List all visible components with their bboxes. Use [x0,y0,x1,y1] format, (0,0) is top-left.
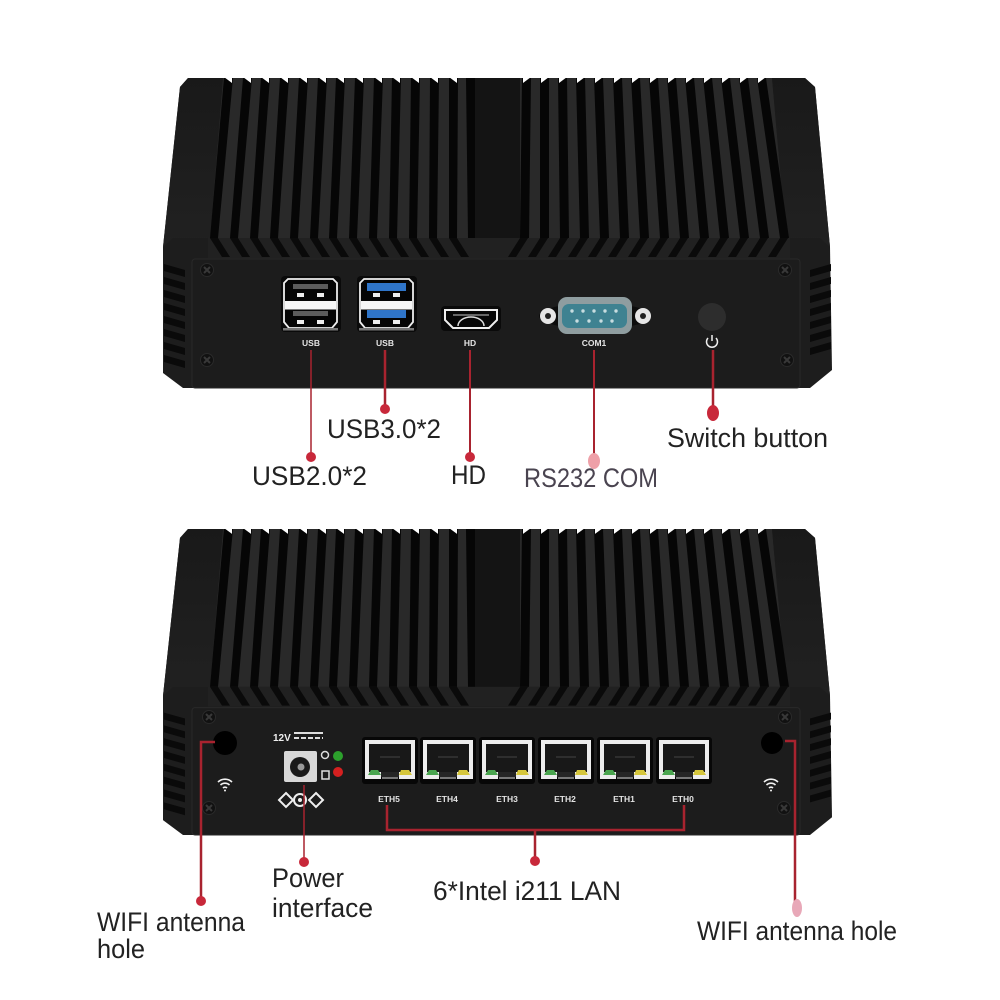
device body with heat-sink fins [163,77,832,388]
label: 6*Intel i211 LAN: 6*Intel i211 LAN [433,876,621,906]
label: WIFI antenna hole (left): WIFI antenna [97,907,245,937]
label: WIFI antenna hole (left): hole [97,934,145,964]
Ethernet captions: ETH1 [613,794,635,804]
port captions [302,338,607,348]
USB 3.0 port [357,276,417,332]
label: Switch button: Switch button [667,423,828,453]
Ethernet captions: ETH5 [378,794,400,804]
label: USB2.0*2: USB2.0*2 [252,461,367,491]
panel screws [202,710,792,814]
bottom device: LAN side [163,528,832,835]
callout dots: top device [306,404,719,469]
HDMI port [441,306,501,331]
label: RS232 COM: RS232 COM [524,463,658,493]
port captions: COM1 [582,338,607,348]
port captions: USB [376,338,394,348]
switch button [698,303,726,347]
WIFI antenna holes [213,731,783,755]
Ethernet captions: ETH3 [496,794,518,804]
callout lines: top device [311,350,713,458]
label: HD: HD [451,460,486,490]
Ethernet captions: ETH4 [436,794,458,804]
callout dots: bottom device [196,856,802,917]
USB 2.0 port [281,276,341,332]
callout lines: bottom device [201,741,795,905]
WIFI icons [218,779,778,792]
device body with heat-sink fins [163,528,832,835]
port captions: HD [464,338,476,348]
Ethernet captions: ETH2 [554,794,576,804]
Ethernet captions [378,794,694,804]
power connector: 12V [273,733,291,744]
top device: USB, HD and COM side [163,77,832,388]
power connector [273,733,343,807]
label: Power interface: interface [272,893,373,923]
label: Power interface: Power [272,863,344,893]
panel screws [200,264,794,366]
label: USB3.0*2: USB3.0*2 [327,414,441,444]
port captions: USB [302,338,320,348]
COM1 serial port [539,297,651,334]
label: Power interface [272,863,373,923]
label: WIFI antenna hole (right): WIFI antenna hole [697,916,897,946]
label: WIFI antenna hole (left) [97,907,245,964]
Ethernet captions: ETH0 [672,794,694,804]
Ethernet ports [362,737,712,784]
